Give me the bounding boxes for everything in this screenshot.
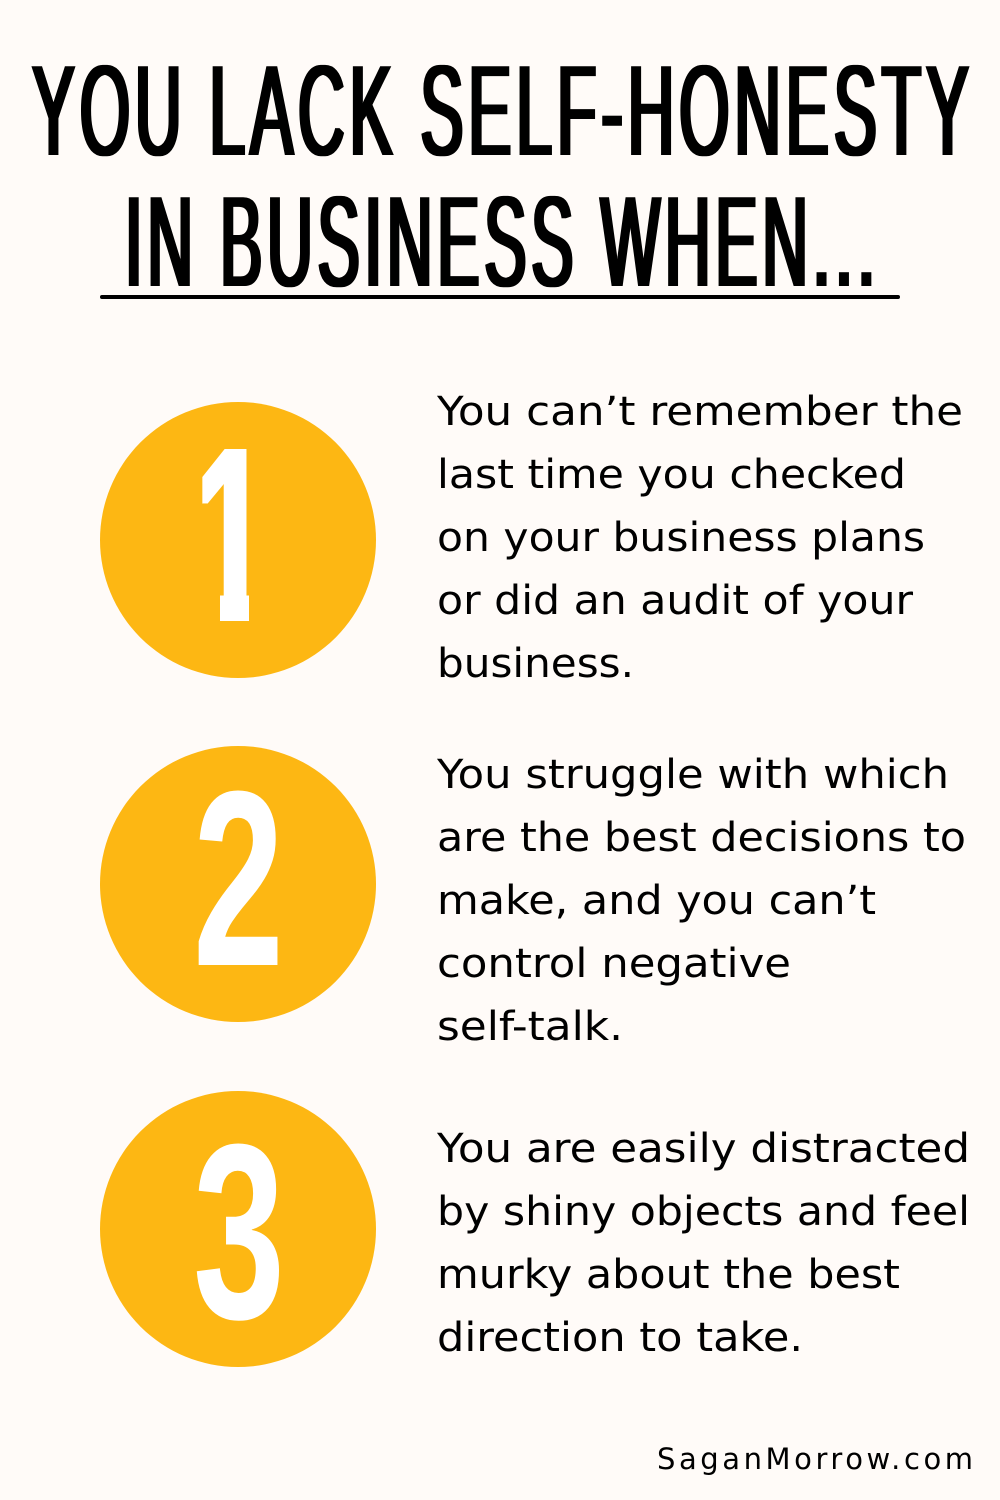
item 3 text: by shiny objects and feel — [437, 1189, 970, 1235]
item 1 text: last time you checked — [437, 452, 906, 498]
item 1 — [100, 389, 963, 687]
item 2 text: make, and you can’t — [437, 878, 876, 924]
item 2 text — [436, 752, 966, 1050]
number badge 2 — [100, 739, 376, 1022]
item 1 text: business. — [437, 641, 634, 687]
title — [32, 39, 974, 314]
item 1 text: You can’t remember the — [436, 389, 963, 435]
item 1 text: on your business plans — [437, 515, 925, 561]
number badge 3: 3 — [193, 1092, 285, 1371]
item 1 text: or did an audit of your — [437, 578, 914, 624]
number badge 3 — [100, 1091, 376, 1371]
footer website: SaganMorrow.com — [657, 1442, 973, 1476]
item 2 — [100, 739, 966, 1050]
item 2 text: You struggle with which — [436, 752, 949, 798]
number badge 1 — [100, 395, 376, 678]
number badge 1: 1 — [196, 395, 268, 674]
item 2 text: self-talk. — [437, 1004, 623, 1050]
number badge 2: 2 — [193, 739, 284, 1018]
item 3 text: murky about the best — [437, 1252, 900, 1298]
item 2 text: control negative — [437, 941, 791, 987]
item 3 text: direction to take. — [437, 1315, 803, 1361]
item 3 text: You are easily distracted — [436, 1126, 970, 1172]
item 3 — [100, 1091, 970, 1371]
item 3 text — [436, 1126, 970, 1361]
item 2 text: are the best decisions to — [437, 815, 966, 861]
item 1 text — [436, 389, 963, 687]
